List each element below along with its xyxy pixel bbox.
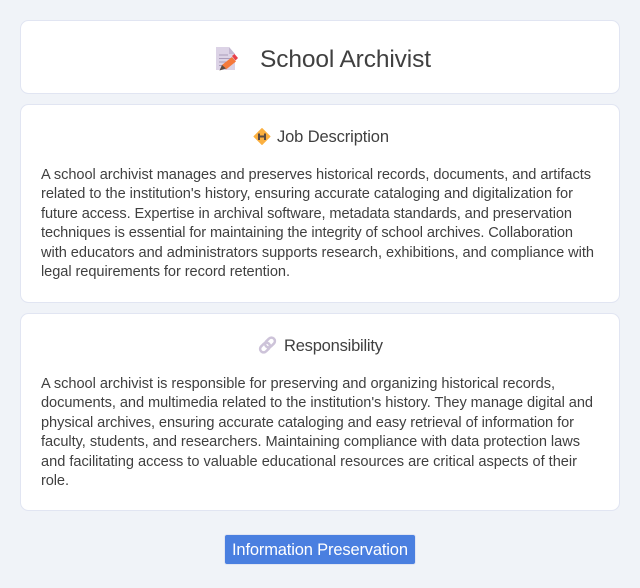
text block: job description: future access. Expertise in archival software, metadata standards, and preservation — [41, 206, 572, 222]
text block: responsibility: physical archives, ensuring accurate cataloging and easy retrieval of information for — [41, 415, 574, 431]
text block: responsibility: A school archivist is responsible for preserving and organizing historical records, — [41, 376, 555, 392]
text block: job description: A school archivist manages and preserves historical records, documents, and artifacts — [41, 167, 591, 183]
text block: responsibility — [41, 376, 593, 489]
panel: responsibility — [20, 314, 620, 510]
text block: responsibility: role. — [41, 473, 69, 489]
text block: job description: with educators and administrators supports research, exhibitions, and compliance with — [40, 245, 594, 261]
button: information preservation: Information Preservation — [232, 541, 408, 559]
text block: responsibility: and facilitating access to valuable educational resources are critical aspects of their — [41, 454, 577, 470]
text block: job description: related to the institution's history, ensuring accurate cataloging and digitalization for — [41, 186, 573, 202]
title: School Archivist — [260, 46, 431, 73]
text block: job description: techniques is essential for maintaining the integrity of school archives. Collaboration — [41, 225, 573, 241]
button: information preservation — [224, 534, 416, 564]
heading: responsibility: Responsibility — [284, 337, 384, 355]
heading: job description: Job Description — [277, 128, 389, 146]
icon: document with pencil — [216, 47, 238, 70]
text block: job description — [40, 167, 594, 280]
icon: diamond road sign — [254, 128, 270, 144]
text block: job description: legal requirements for record retention. — [41, 264, 290, 280]
panel: title card — [20, 20, 620, 94]
panel: job description — [20, 104, 620, 302]
icon: chain link — [259, 336, 276, 354]
text block: responsibility: documents, and multimedia related to the institution's history. They manage digital and — [41, 395, 593, 411]
text block: responsibility: faculty, students, and researchers. Maintaining compliance with data protection laws — [41, 434, 580, 450]
